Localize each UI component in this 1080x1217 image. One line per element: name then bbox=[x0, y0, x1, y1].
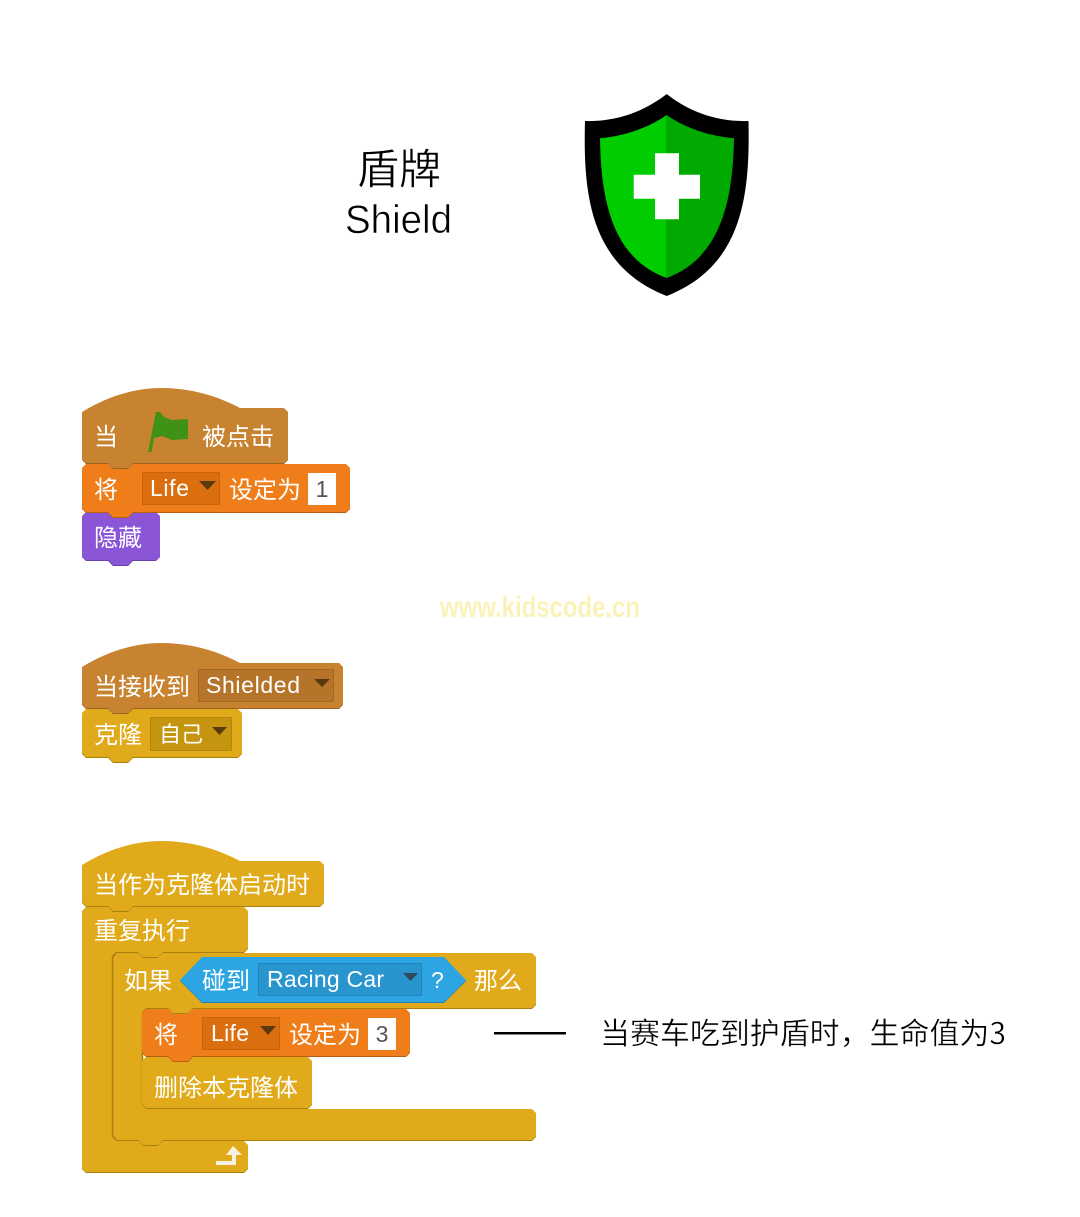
script: when start as clone bbox=[82, 841, 536, 1172]
condition: touching Racing Car: Racing Car bbox=[267, 966, 384, 992]
block: set Life to 1: Life bbox=[150, 475, 189, 501]
icon: loop arrow bbox=[216, 1146, 242, 1165]
watermark: www.kidscode.cn bbox=[439, 591, 640, 624]
title: 盾牌 Shield: 盾牌 bbox=[357, 136, 441, 197]
block: when start as clone hat bbox=[82, 841, 324, 911]
condition: touching Racing Car: ? bbox=[431, 967, 444, 993]
block: if touching Racing Car bbox=[112, 953, 536, 1145]
block: clone myself: 自己 bbox=[159, 717, 203, 749]
block: when receive hat: 当接收到 bbox=[94, 667, 190, 702]
block: when start as clone hat: 当作为克隆体启动时 bbox=[94, 865, 310, 900]
script: when flag clicked bbox=[82, 388, 350, 565]
block: hide: 隐藏 bbox=[94, 518, 142, 553]
block: set Life to 3: Life bbox=[211, 1020, 249, 1046]
block: when flag clicked hat: 当 bbox=[94, 417, 118, 452]
block: delete this clone bbox=[142, 1057, 312, 1108]
block: set Life to 3: 3 bbox=[376, 1021, 388, 1047]
block: when receive hat bbox=[82, 643, 343, 713]
block: set Life to 3: 将 bbox=[154, 1015, 178, 1050]
block: when flag clicked hat: 被点击 bbox=[202, 417, 274, 452]
block: clone myself bbox=[82, 709, 242, 762]
block: forever loop bbox=[82, 907, 248, 1172]
icon: green shield with white cross bbox=[585, 94, 749, 296]
title: 盾牌 Shield: Shield bbox=[345, 198, 452, 242]
script: when receive Shielded bbox=[82, 643, 343, 762]
icon: green flag bbox=[148, 412, 188, 452]
block: if touching Racing Car: 那么 bbox=[474, 961, 522, 996]
block: when receive hat: Shielded bbox=[206, 672, 300, 698]
block: set Life to 3: 设定为 bbox=[289, 1015, 361, 1050]
block: set Life to 1 bbox=[82, 464, 350, 517]
condition: touching Racing Car: 碰到 bbox=[202, 961, 250, 996]
block: forever loop: 重复执行 bbox=[94, 911, 190, 946]
block: set Life to 1: 1 bbox=[316, 476, 328, 502]
block: when flag clicked hat bbox=[82, 388, 288, 468]
title: 盾牌 Shield bbox=[345, 136, 452, 242]
block: set Life to 1: 将 bbox=[94, 470, 118, 505]
condition: touching Racing Car bbox=[180, 957, 466, 1002]
block: set Life to 1: 设定为 bbox=[229, 470, 301, 505]
block: if touching Racing Car: 如果 bbox=[124, 961, 172, 996]
block: hide bbox=[82, 512, 160, 565]
block: set Life to 3 bbox=[142, 1009, 410, 1061]
callout line bbox=[494, 1032, 566, 1034]
block: clone myself: 克隆 bbox=[94, 715, 142, 750]
block: delete this clone: 删除本克隆体 bbox=[154, 1068, 298, 1103]
callout text: 当赛车吃到护盾时，生命值为3 bbox=[600, 1009, 1006, 1053]
